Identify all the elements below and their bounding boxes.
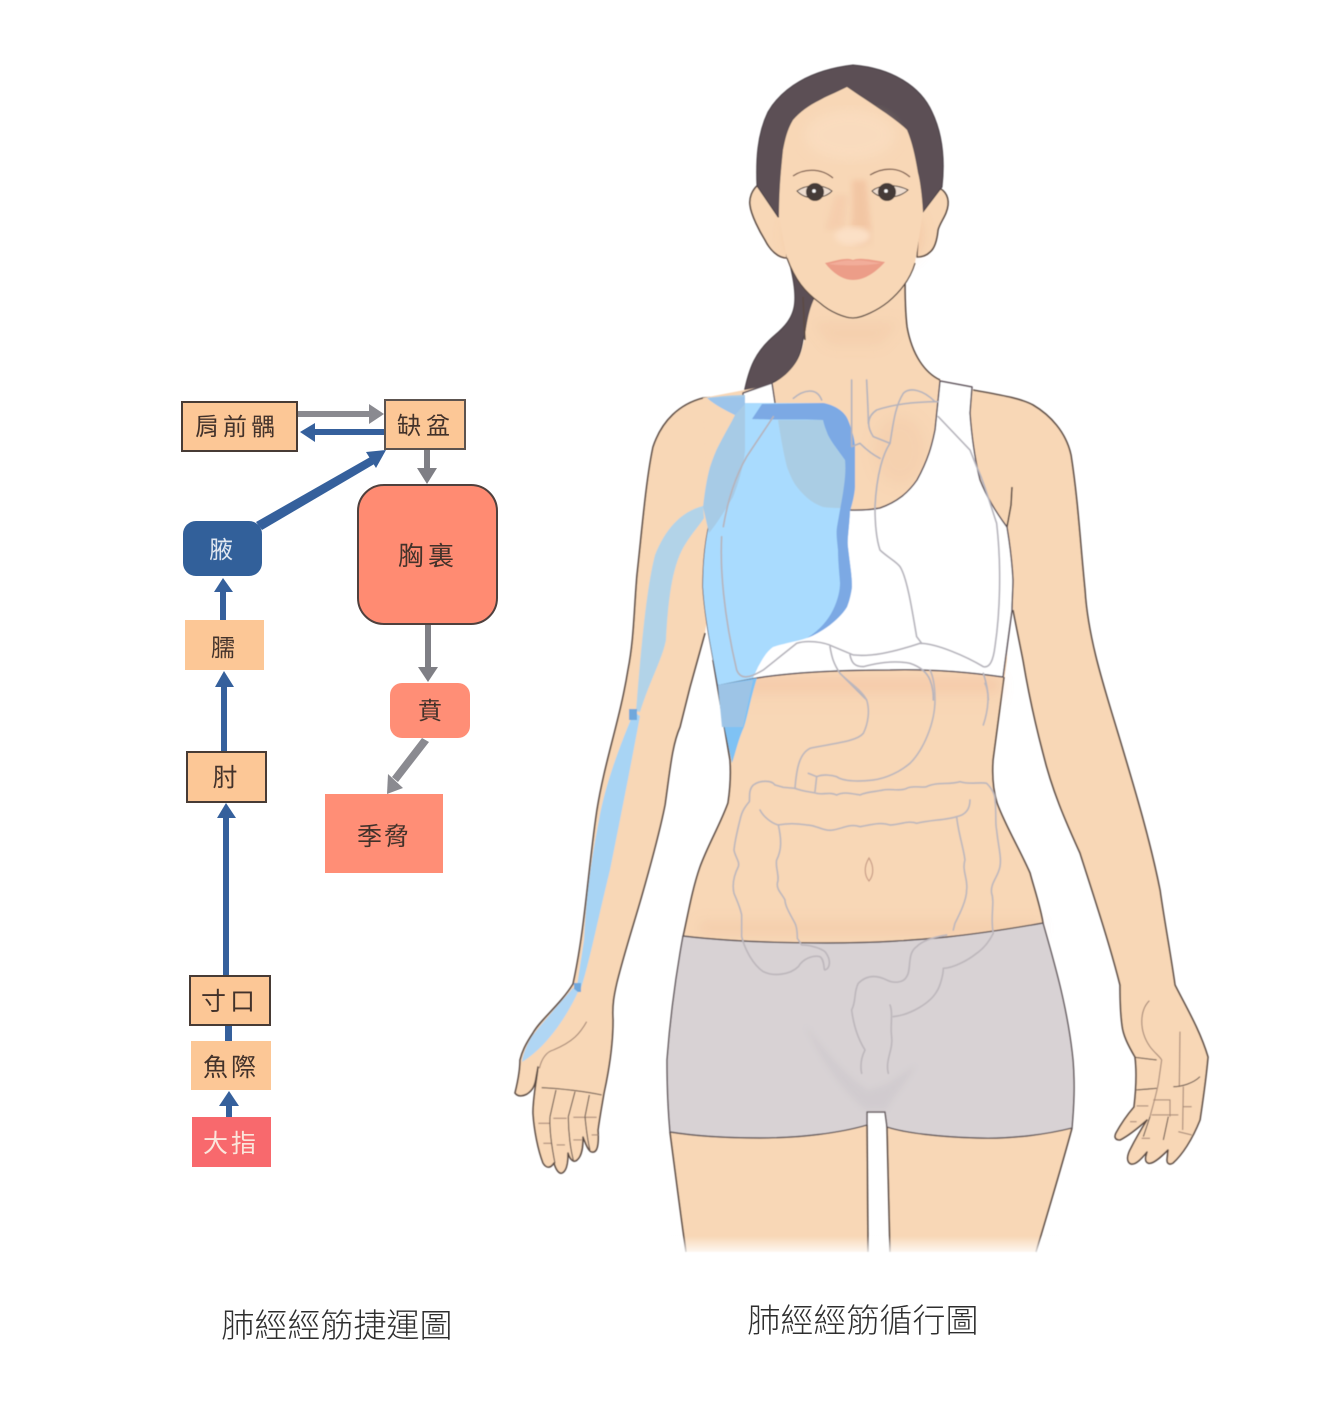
arrow: 寸口 to 肘: [217, 803, 236, 977]
box: 大指: [192, 1117, 271, 1167]
box: 胸裏: 胸裏: [398, 541, 458, 571]
arrow: 賁 to 季脅: [387, 738, 429, 794]
grey blue shoulder overlap: [703, 395, 745, 533]
eye socket shading: [825, 195, 848, 230]
arrow: 肘 to 臑: [215, 671, 234, 753]
box: 缺盆: [385, 400, 465, 449]
navel: [865, 858, 873, 881]
right arm and hand: [973, 390, 1208, 1164]
lower torso blue: [718, 678, 757, 763]
right eyebrow: [870, 169, 910, 177]
light blue chest area: [703, 403, 855, 685]
box: 胸裏: [358, 485, 497, 624]
box: 魚際: 魚際: [203, 1054, 259, 1082]
right eye: [872, 183, 908, 201]
neck shading: [812, 322, 900, 345]
box: 大指: 大指: [203, 1130, 259, 1158]
hand details: right hand creases: [1130, 1001, 1200, 1140]
box: 肘: [187, 752, 266, 802]
caption: figure title: 肺經經筋循行圖: [748, 1302, 978, 1339]
box: 賁: [390, 683, 470, 738]
face: [779, 87, 923, 318]
chest shading: [874, 416, 926, 484]
stomach: [795, 673, 868, 788]
box: 魚際: [191, 1041, 271, 1090]
figure: female body with lung meridian sinew: [515, 65, 1208, 1256]
arrow: 臑 to 腋: [214, 578, 233, 621]
nose shading: [850, 180, 872, 245]
shoulder tip: [707, 397, 745, 415]
forehead highlight: [805, 110, 895, 160]
box: 寸口: 寸口: [201, 988, 259, 1016]
caption: flow chart title: 肺經經筋捷運圖: [222, 1307, 452, 1344]
hand band: [522, 988, 578, 1062]
box: 臑: [185, 620, 264, 670]
chest meridian: blue region: [703, 395, 855, 763]
hand details: left hand creases: [538, 1022, 602, 1163]
soft skin shading: [700, 211, 1040, 934]
upper arm band: [636, 506, 704, 712]
leg fade at bottom: [670, 1236, 1060, 1256]
box: 缺盆: 缺盆: [397, 413, 455, 440]
arrow: 胸裏 to 賁: [418, 624, 438, 682]
box: 賁: 賁: [418, 698, 442, 725]
left eye: [797, 183, 832, 201]
box: 肩前髃: 肩前髃: [195, 414, 279, 441]
box: 季脅: [325, 794, 443, 873]
left eyebrow: [793, 170, 833, 178]
arrow: 大指 to 魚際: [219, 1091, 239, 1118]
left ear: [750, 185, 787, 258]
nose tip: [835, 227, 871, 245]
head: hair and face: [757, 65, 943, 318]
box: 腋: [183, 521, 262, 576]
lips: [825, 259, 885, 280]
body skin: [515, 185, 1208, 1173]
arrow: 缺盆 to 肩前髃: [300, 423, 386, 442]
forearm band: [577, 712, 640, 988]
arrow: 缺盆 to 胸裏: [417, 449, 437, 484]
body contour lines: [670, 283, 1072, 1252]
arm meridian: blue band along the arm: [522, 506, 704, 1062]
wrist point: [574, 983, 581, 992]
ponytail: [744, 265, 815, 393]
organ lines: stomach and intestines: [733, 670, 1000, 1073]
flow chart: lung meridian sinew pathway: [182, 400, 497, 1167]
organ lines: lungs and trachea: [721, 380, 1000, 700]
arrow: 魚際 to 寸口: [225, 1025, 232, 1042]
arrow: 肩前髃 to 缺盆: [298, 404, 384, 424]
box: 臑: 臑: [211, 635, 235, 662]
box: 腋: 腋: [209, 537, 233, 564]
left arm and hand: [515, 395, 743, 1173]
arrow: 腋 to 缺盆: [256, 450, 386, 530]
meridian dark band: [752, 403, 855, 638]
grey shorts: [667, 923, 1074, 1138]
box: 肩前髃: [182, 402, 297, 451]
waist shading: [700, 922, 1040, 934]
colon: [733, 781, 829, 974]
grey blue breast overlap: [778, 420, 846, 508]
hair: [757, 65, 943, 217]
torso, neck and legs fill: [667, 283, 1074, 1252]
shorts fold shading: [805, 1025, 916, 1110]
box: 肘: 肘: [212, 764, 238, 792]
box: 季脅: 季脅: [357, 823, 411, 851]
diaphragm shading: [745, 680, 1000, 704]
face shading cheeks: [786, 211, 814, 259]
elbow point: [629, 709, 637, 720]
face jaw outline: [787, 258, 915, 318]
right ear: [917, 187, 948, 257]
lower torso shade: [718, 680, 753, 727]
box: 寸口: [190, 976, 270, 1025]
white top: [703, 381, 1013, 685]
